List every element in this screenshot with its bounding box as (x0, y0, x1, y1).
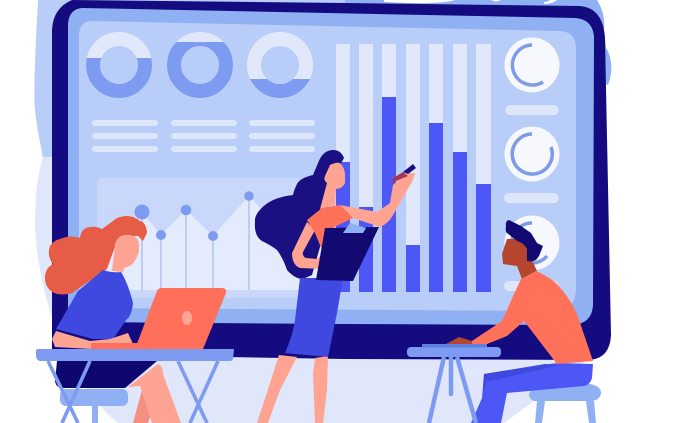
donut charts (93, 39, 306, 91)
skirt (55, 361, 157, 388)
stool (529, 384, 601, 423)
skirt (285, 278, 343, 357)
person: seated man (407, 220, 601, 423)
person: seated woman with laptop (36, 216, 234, 423)
left arm (292, 222, 336, 269)
near leg (257, 355, 297, 423)
gauges (504, 38, 560, 291)
hair (506, 220, 543, 261)
text placeholder lines (92, 120, 315, 152)
clipboard (316, 223, 379, 281)
table (36, 349, 234, 423)
marker (392, 164, 416, 184)
legs (128, 364, 181, 423)
area chart (97, 178, 336, 298)
pants (471, 363, 593, 423)
monitor frame (52, 0, 611, 360)
bar chart (336, 44, 491, 292)
shirt (307, 205, 353, 250)
chair (60, 389, 128, 423)
person: standing woman presenting (255, 150, 416, 423)
hair (45, 216, 147, 294)
far leg (313, 356, 328, 423)
raised arm (340, 173, 415, 227)
arm (52, 331, 133, 349)
table (407, 344, 501, 423)
shirt (472, 271, 593, 364)
shirt (56, 270, 133, 339)
laptop (91, 288, 226, 349)
neck and face (320, 163, 345, 209)
hand (446, 337, 472, 344)
head (112, 235, 139, 272)
neck and head (502, 239, 537, 279)
hair (255, 150, 344, 279)
